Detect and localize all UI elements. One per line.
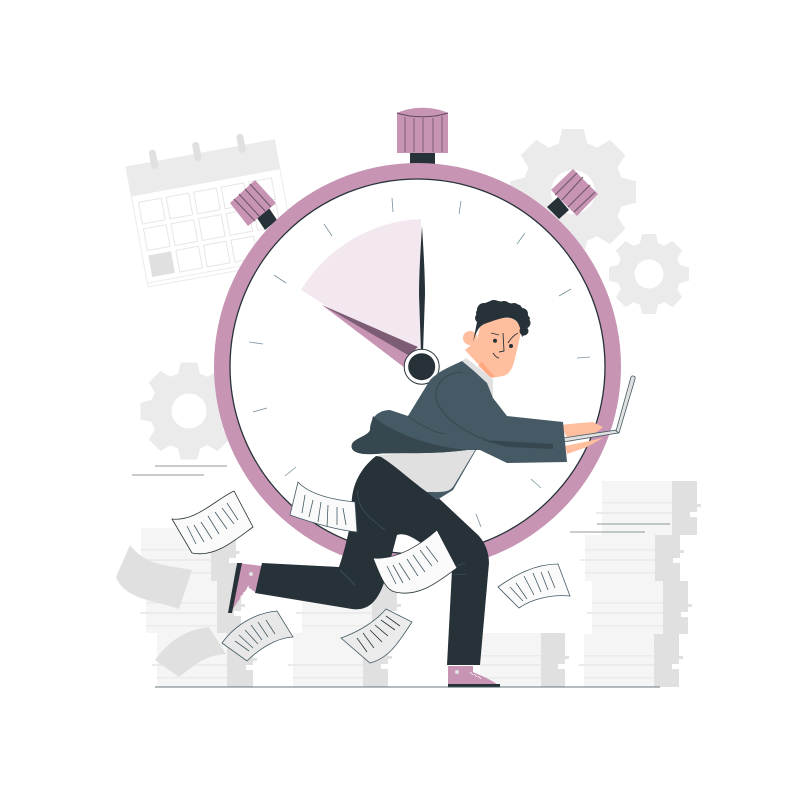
stopwatch right knob — [547, 169, 598, 219]
man: shirt — [378, 437, 483, 492]
paper stack: centre small — [480, 633, 569, 687]
stopwatch face — [214, 163, 621, 570]
stopwatch needle — [419, 226, 425, 352]
flying paper lower left — [222, 611, 293, 661]
elapsed time wedge — [301, 219, 421, 368]
stopwatch centre hub — [404, 349, 439, 384]
flying paper lower centre — [341, 609, 412, 663]
man: front shoe — [448, 666, 500, 688]
paper stack: right tall — [579, 481, 701, 687]
flying paper right — [498, 564, 570, 608]
stopwatch tick marks — [249, 198, 590, 527]
speed lines — [132, 466, 670, 532]
man: trousers — [255, 456, 489, 665]
stopwatch top knob — [397, 108, 448, 164]
man: rear shoe — [228, 563, 262, 613]
man: hair — [473, 300, 530, 342]
grey flying paper — [116, 545, 192, 609]
man: lower jacket back panel — [424, 430, 483, 500]
icon: small gear right — [609, 234, 689, 314]
icon: calendar — [124, 128, 297, 287]
man: hands — [560, 422, 603, 454]
flying paper at thigh — [373, 530, 457, 593]
paper stack: left — [136, 528, 257, 687]
man: shirt collar — [462, 358, 493, 398]
grey flying paper — [155, 627, 226, 677]
man: laptop — [563, 376, 635, 442]
icon: large gear top right — [510, 129, 636, 255]
paper stack: middle — [288, 581, 401, 687]
ground line — [155, 686, 660, 688]
flying paper upper left — [172, 491, 253, 554]
man: neck and face — [463, 318, 521, 378]
stopwatch left knob — [230, 180, 277, 230]
icon: gear left — [140, 362, 238, 460]
man: facial features — [491, 333, 518, 358]
flying paper on clock — [290, 482, 357, 532]
man: jacket and sleeve — [352, 361, 567, 463]
